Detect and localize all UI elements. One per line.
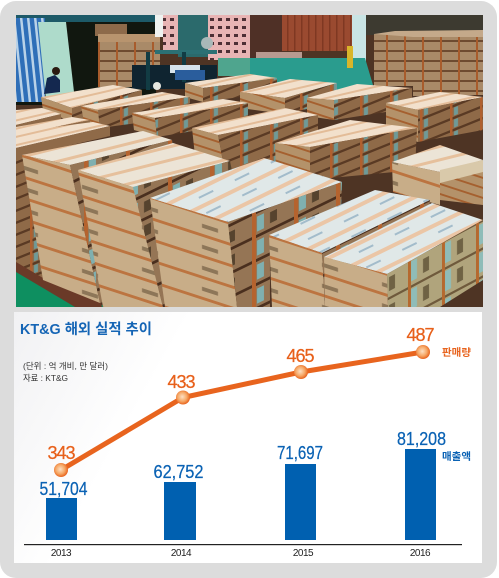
year labels (51, 548, 431, 559)
note: units and source (23, 361, 108, 383)
volume values: 487 (406, 325, 434, 345)
axis line (24, 544, 462, 545)
series label: volume: 판매량 (442, 346, 471, 359)
far pallet stacks (41, 74, 483, 142)
sales values: 81,208 (397, 429, 446, 449)
left stacks (16, 108, 110, 282)
sales values (40, 429, 446, 499)
volume values: 433 (167, 372, 195, 392)
near pallet stacks (22, 131, 483, 307)
green floor (16, 272, 103, 307)
volume values: 343 (47, 443, 75, 463)
forklift (132, 37, 217, 90)
volume values (47, 325, 434, 463)
sales values: 71,697 (277, 443, 323, 463)
line chart: volume (54, 345, 430, 477)
year labels: 2013 (51, 548, 72, 559)
year labels: 2015 (293, 548, 314, 559)
year labels: 2014 (171, 548, 192, 559)
volume values: 465 (286, 346, 314, 366)
container door and interior (16, 15, 160, 105)
sales values: 62,752 (154, 462, 204, 482)
right back stacks (374, 30, 483, 96)
panel: chart (14, 312, 482, 563)
background wall and pallets (155, 15, 484, 95)
photo: pallets of boxes in a warehouse (16, 15, 484, 307)
bar chart: sales (46, 449, 436, 540)
year labels: 2016 (410, 548, 431, 559)
sales values: 51,704 (40, 479, 88, 499)
series label: sales: 매출액 (442, 450, 471, 463)
worker (44, 67, 60, 94)
middle stacks (192, 108, 483, 205)
note: units and source: (단위 : 억 개비, 만 달러) (23, 361, 108, 371)
heading: KT&G 해외 실적 추이 (20, 321, 152, 338)
note: units and source: 자료 : KT&G (23, 373, 68, 383)
pallet bases (16, 262, 43, 288)
